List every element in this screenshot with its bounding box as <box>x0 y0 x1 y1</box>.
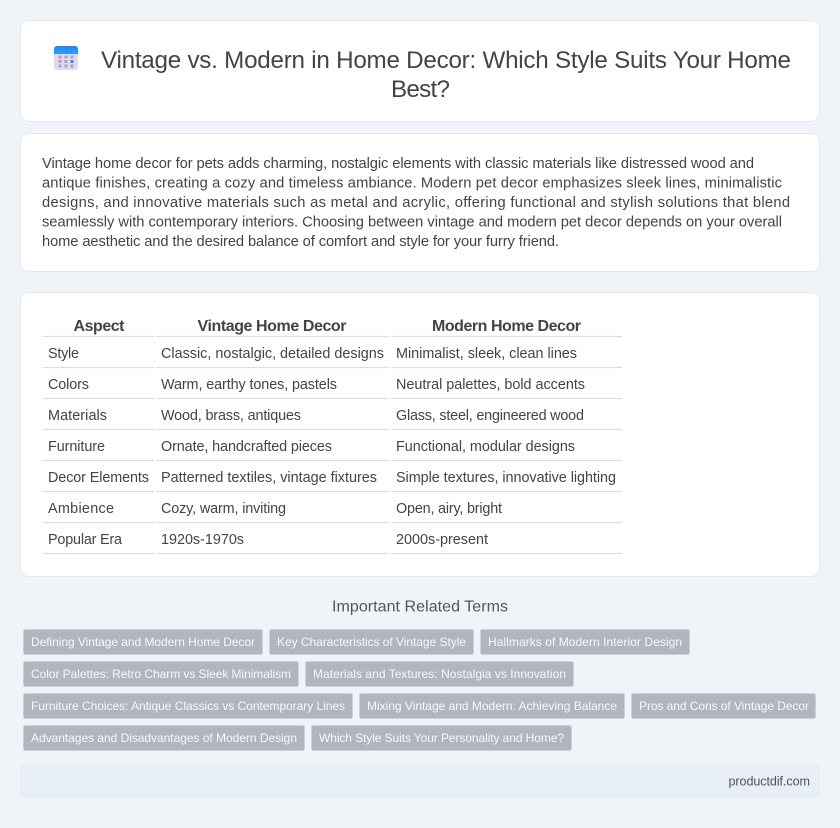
row: ambience: Cozy, warm, inviting <box>161 501 286 517</box>
title: Best? <box>391 76 450 103</box>
text block: introduction paragraph: home aesthetic and the desired balance of comfort and style for your furry friend. <box>42 234 559 250</box>
footer <box>20 765 820 798</box>
row: style: Style <box>48 346 79 362</box>
tag <box>24 726 304 750</box>
title <box>101 47 791 103</box>
row: decor elements: Patterned textiles, vintage fixtures <box>161 470 377 486</box>
table header <box>74 318 581 335</box>
tag <box>312 726 572 750</box>
row: colors: Neutral palettes, bold accents <box>396 377 585 393</box>
row: colors <box>48 377 585 393</box>
tag: Advantages and Disadvantages of Modern Design <box>31 731 297 745</box>
table header: Modern Home Decor <box>432 318 581 335</box>
tag: Hallmarks of Modern Interior Design <box>488 635 682 649</box>
title: Vintage vs. Modern in Home Decor: Which Style Suits Your Home <box>101 47 791 74</box>
tag <box>24 694 352 718</box>
panel: introduction <box>20 134 820 272</box>
tag: Furniture Choices: Antique Classics vs Contemporary Lines <box>31 699 345 713</box>
row: furniture <box>48 439 575 455</box>
tag <box>360 694 624 718</box>
row: materials: Wood, brass, antiques <box>161 408 301 424</box>
row: furniture: Furniture <box>48 439 105 455</box>
row: colors: Warm, earthy tones, pastels <box>161 377 337 393</box>
tag: Color Palettes: Retro Charm vs Sleek Minimalism <box>31 667 291 681</box>
panel: comparison table <box>20 292 820 576</box>
text block: introduction paragraph: Vintage home decor for pets adds charming, nostalgic elements with classic materials like distressed wood and <box>42 156 754 172</box>
text block: introduction paragraph: seamlessly with contemporary interiors. Choosing between vintage and modern pet decor depends on your overall <box>42 214 782 230</box>
tag: Pros and Cons of Vintage Decor <box>639 699 809 713</box>
table grid lines <box>43 336 622 554</box>
row: style: Minimalist, sleek, clean lines <box>396 346 577 362</box>
row: style <box>48 346 577 362</box>
row: popular era <box>48 532 488 548</box>
row: materials <box>48 408 584 424</box>
icon: calendar <box>54 46 78 70</box>
row: popular era: 2000s-present <box>396 532 488 548</box>
heading: important related terms: Important Related Terms <box>332 598 508 616</box>
tag <box>270 630 474 654</box>
tag <box>24 630 262 654</box>
row: style: Classic, nostalgic, detailed designs <box>161 346 384 362</box>
row: popular era: Popular Era <box>48 532 122 548</box>
panel: title header <box>20 20 820 122</box>
row: decor elements <box>48 470 616 486</box>
tag: Mixing Vintage and Modern: Achieving Balance <box>367 699 617 713</box>
row: ambience <box>48 501 502 517</box>
footer: productdif.com <box>728 774 810 788</box>
table header: Vintage Home Decor <box>198 318 346 335</box>
tag: Which Style Suits Your Personality and Home? <box>319 731 564 745</box>
row: popular era: 1920s-1970s <box>161 532 244 548</box>
row: colors: Colors <box>48 377 89 393</box>
row: decor elements: Simple textures, innovative lighting <box>396 470 616 486</box>
tag <box>24 662 298 686</box>
row: materials: Materials <box>48 408 107 424</box>
table header: Aspect <box>74 318 125 335</box>
row: furniture: Ornate, handcrafted pieces <box>161 439 332 455</box>
tag: Materials and Textures: Nostalgia vs Innovation <box>313 667 566 681</box>
text block: introduction paragraph: designs, and innovative materials such as metal and acrylic, offering functional and stylish solutions that blend <box>42 195 790 211</box>
tag list: related terms <box>24 630 816 750</box>
tag <box>632 694 816 718</box>
row: materials: Glass, steel, engineered wood <box>396 408 584 424</box>
tag <box>306 662 574 686</box>
row: furniture: Functional, modular designs <box>396 439 575 455</box>
text block: introduction paragraph: antique finishes, creating a cozy and timeless ambiance. Modern pet decor emphasizes sleek lines, minimalistic <box>42 176 782 192</box>
tag <box>480 630 690 654</box>
tag: Key Characteristics of Vintage Style <box>277 635 466 649</box>
row: decor elements: Decor Elements <box>48 470 149 486</box>
row: ambience: Ambience <box>48 501 114 517</box>
tag: Defining Vintage and Modern Home Decor <box>31 635 255 649</box>
row: ambience: Open, airy, bright <box>396 501 502 517</box>
text block: introduction paragraph <box>42 156 790 250</box>
